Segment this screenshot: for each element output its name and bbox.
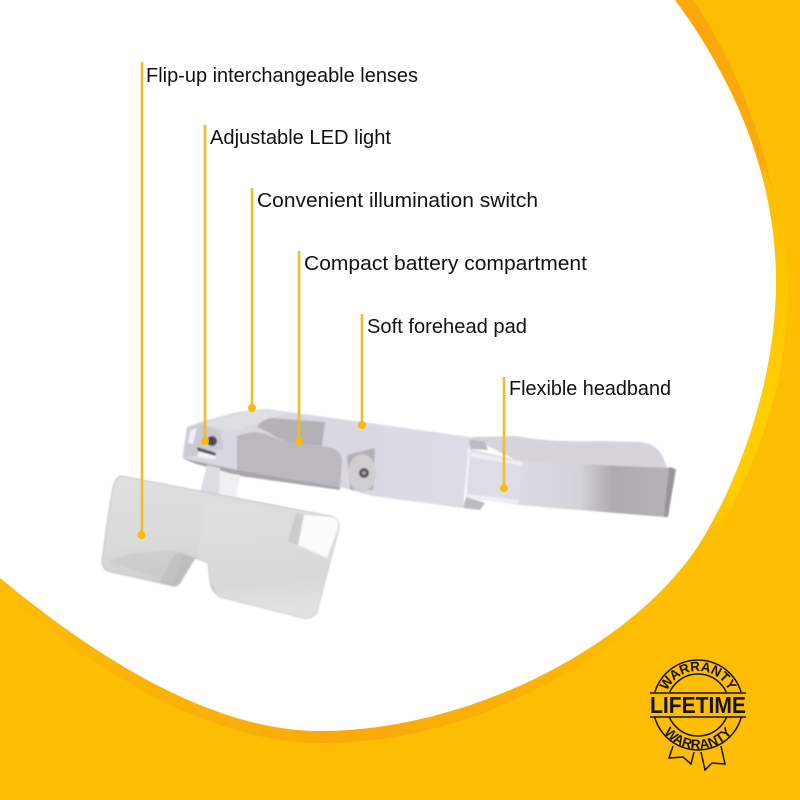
battery compartment [237,418,342,487]
badge center strip [648,692,748,717]
callout: soft forehead pad: Soft forehead pad [367,315,527,338]
headband front section [518,462,673,517]
callout: convenient illumination switch [248,188,538,412]
callout: adjustable LED light: Adjustable LED light [210,126,391,149]
lens [102,476,339,618]
badge: lifetime warranty [650,659,746,772]
product: magnifying headset [102,409,676,618]
callout: flexible headband: Flexible headband [509,377,671,400]
badge strip rules [650,693,746,717]
callout: convenient illumination switch: Convenient illumination switch [257,189,538,212]
badge rings [653,660,743,750]
callout: flexible headband [500,377,671,492]
callout: flip-up interchangeable lenses [138,62,418,539]
badge bottom arc text: WARRANTY [666,726,730,750]
headband end cap [664,467,676,517]
badge main word: LIFETIME [650,692,746,718]
lens hinge [199,465,240,500]
accent band: yellow right [690,170,788,545]
callout: soft forehead pad [358,314,527,429]
accent band: orange top right [672,0,782,240]
callout: flip-up interchangeable lenses: Flip-up interchangeable lenses [146,64,418,87]
callout: adjustable LED light [201,125,391,445]
panel shadow at underside [182,458,340,490]
headband slider [466,449,522,505]
housing top ridge [205,410,287,430]
callout: compact battery compartment: Compact battery compartment [304,252,587,275]
headband rear section [470,436,667,468]
forehead panel [182,409,470,508]
accent band: orange bottom [0,590,640,743]
LED switch housing [184,424,224,459]
callout: compact battery compartment [295,251,587,445]
badge ribbons [669,746,725,770]
screw knob [347,448,376,492]
panel clips [463,438,488,510]
badge top arc text: WARRANTY [658,662,737,689]
